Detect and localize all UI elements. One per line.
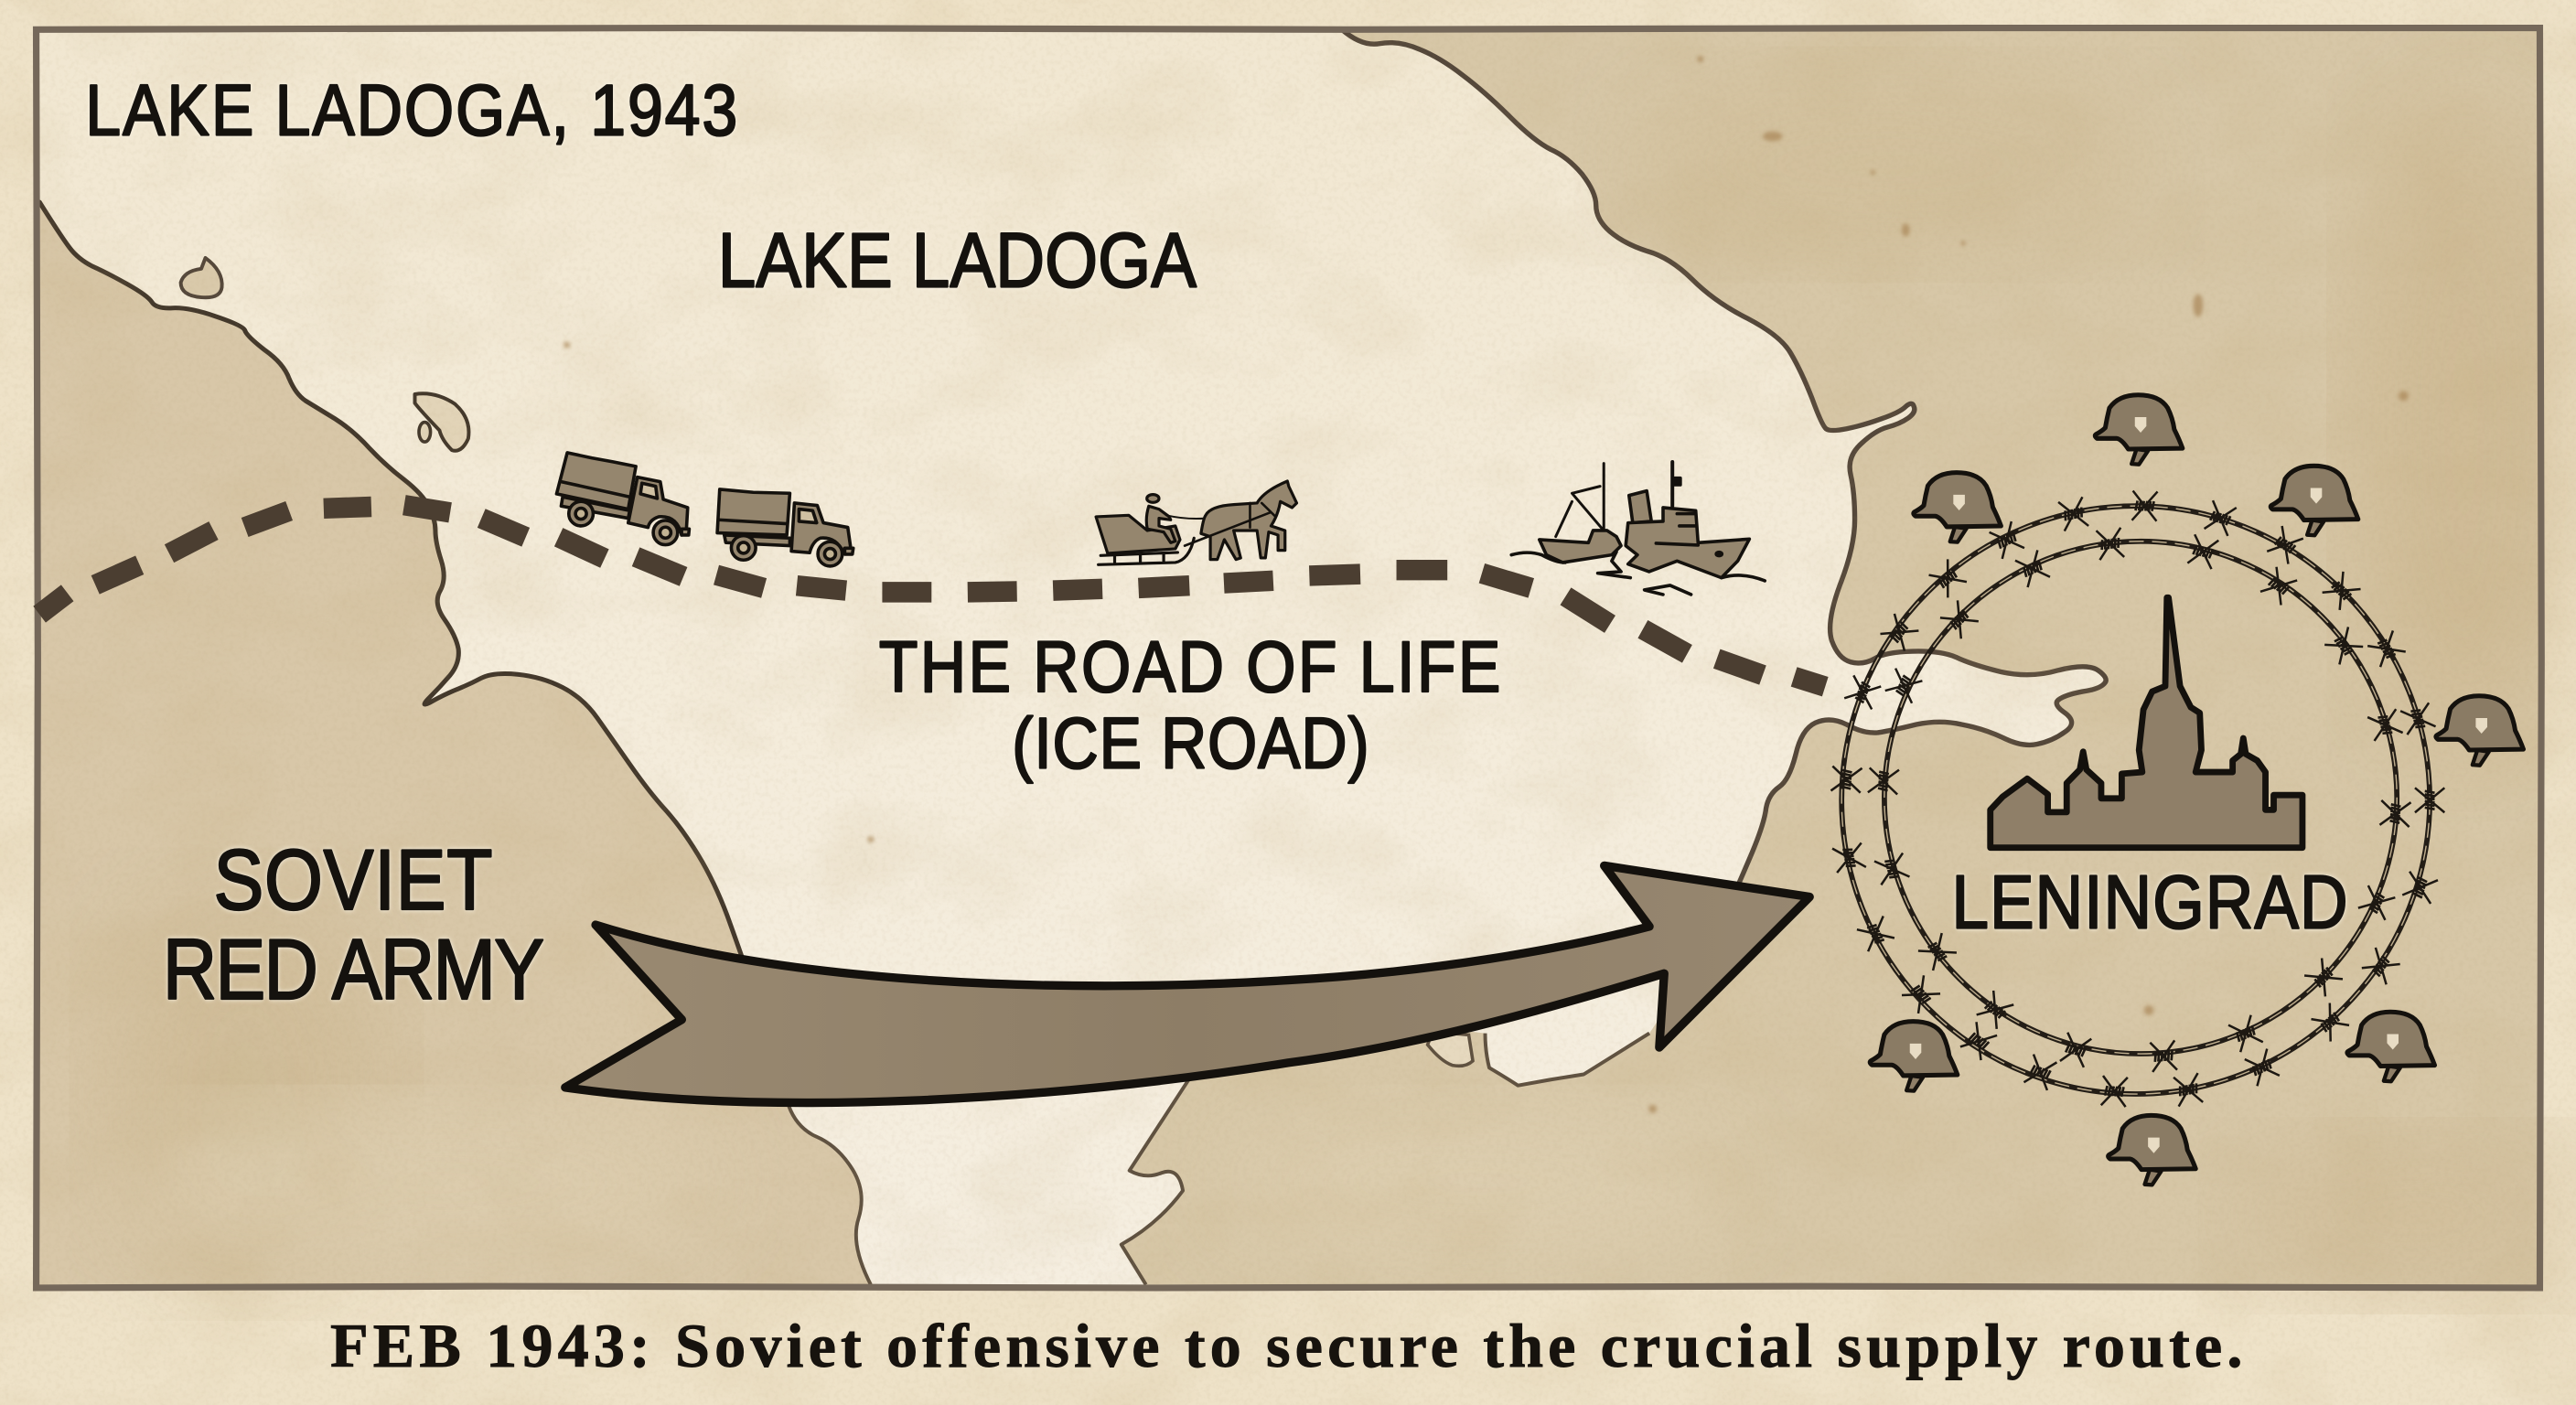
title: LAKE LADOGA, 1943 [85,70,737,150]
Soviet offensive arrow [565,865,1809,1102]
helmet lower left [1870,1022,1958,1091]
helmet lower right [2347,1012,2435,1081]
icon: truck 1 [556,453,689,545]
icon: Leningrad city silhouette [1991,597,2302,848]
icon: horse-drawn sleigh [1096,481,1296,564]
west coastline [39,202,754,992]
label: Leningrad: LENINGRAD [1952,861,2348,945]
east coastline [1341,29,2106,917]
label: The Road of Life: THE ROAD OF LIFE [879,627,1500,707]
icon: sinking ships in broken ice [1511,462,1765,595]
west land: Soviet side [37,202,871,1286]
inner wire [1884,542,2397,1054]
label: Red Army: RED ARMY [163,921,544,1017]
south-west coastline [789,1106,871,1284]
small lake pocket below arrow [1428,1032,1473,1066]
outer wire [1841,506,2430,1094]
helmet bottom [2109,1115,2195,1185]
helmet top [2095,395,2183,465]
helmet upper left [1914,473,2001,542]
south-east coastline [1122,1034,1649,1284]
helmet upper right [2270,466,2358,535]
icon: truck 2 [717,489,853,566]
label: Lake Ladoga: LAKE LADOGA [718,217,1197,303]
barbs on inner wire [1868,528,2411,1072]
east land: German-held side [1122,29,2539,1286]
island south [414,393,468,451]
caption: FEB 1943: Soviet offensive to secure the crucial supply route. [330,1311,2242,1380]
helmet right [2436,696,2523,766]
barbed wire rings [1830,490,2444,1107]
ice road dashed route [39,505,1825,687]
label: Ice Road: (ICE ROAD) [1012,702,1369,784]
island north [181,258,222,297]
label: Soviet: SOVIET [214,831,493,928]
foxing specks [564,56,2409,1113]
barbs on outer wire [1830,490,2444,1107]
